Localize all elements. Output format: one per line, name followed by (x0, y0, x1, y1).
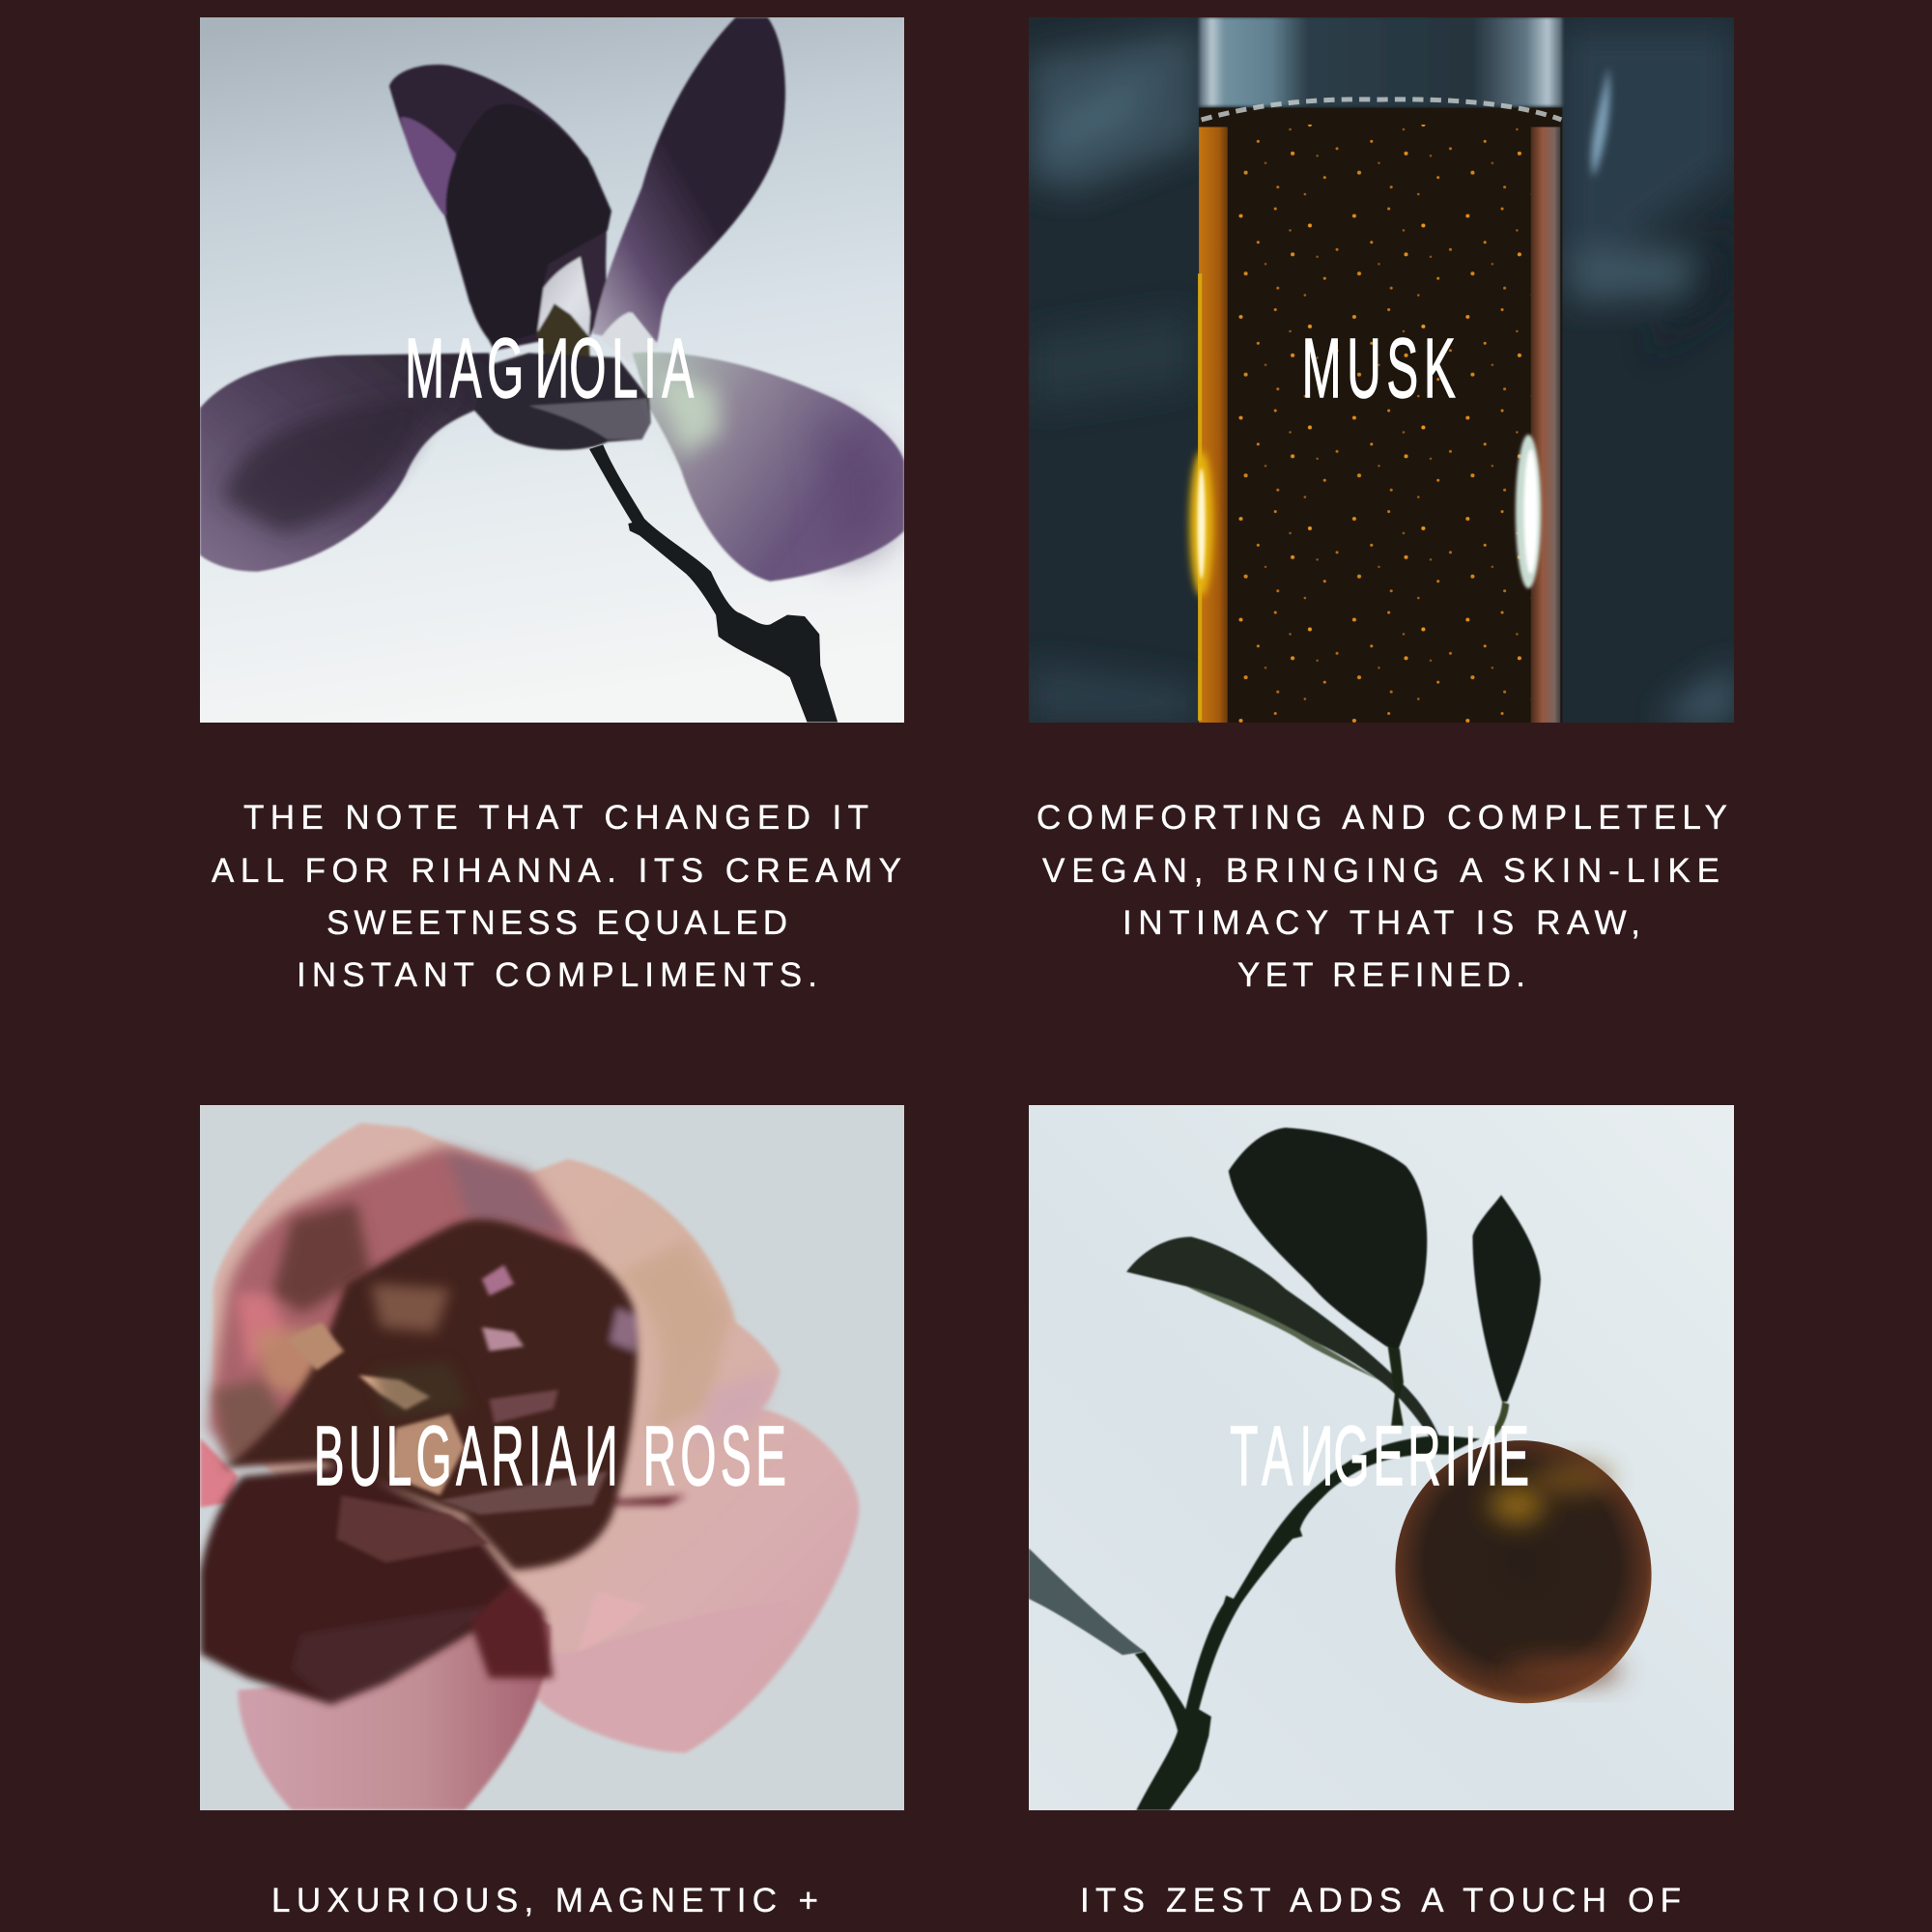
body text: bulgarian rose: LUXURIOUS, MAGNETIC + (271, 1882, 818, 1919)
pale background (200, 1105, 904, 1810)
body text: magnolia: SWEETNESS EQUALED (327, 904, 787, 942)
photo: amber liquid bottle in smoke (1029, 17, 1734, 723)
lower left leaf (1029, 1548, 1145, 1655)
body text: magnolia (211, 799, 901, 994)
body text: musk: YET REFINED. (1237, 956, 1525, 994)
panel: bulgarian rose (200, 1105, 904, 1810)
red left petals (209, 1147, 593, 1462)
body text: musk (1037, 799, 1727, 994)
title: tangerine: N (1296, 1409, 1333, 1503)
smoke wisp (1591, 67, 1609, 178)
meniscus bubbles (1202, 99, 1561, 120)
panel: magnolia (200, 17, 904, 723)
tangerine fruit (1371, 1417, 1676, 1726)
title: tangerine: TA GERI E (1230, 1409, 1533, 1503)
dark rose core (200, 1219, 687, 1705)
outer petals (200, 1122, 859, 1810)
inner petal highlights (287, 1264, 608, 1563)
body text: musk: VEGAN, BRINGING A SKIN-LIKE (1042, 852, 1719, 890)
body text: magnolia: THE NOTE THAT CHANGED IT (243, 799, 868, 837)
photo: rose (200, 1105, 904, 1810)
title: bulgarian rose: N (581, 1409, 618, 1503)
title: tangerine: N (1462, 1409, 1498, 1503)
dark background (1029, 17, 1734, 723)
title: magnolia: MAG OLIA (405, 322, 699, 415)
title: bulgarian rose: BULGARIA ROSE (314, 1409, 790, 1503)
petal shading (223, 389, 465, 533)
panel: tangerine (1029, 1105, 1734, 1810)
flower petals (200, 17, 904, 582)
body text: tangerine: ITS ZEST ADDS A TOUCH OF (1080, 1882, 1681, 1919)
sky background (200, 17, 904, 723)
photo: magnolia flower (200, 17, 904, 723)
body text: musk: INTIMACY THAT IS RAW, (1122, 904, 1640, 942)
peach upper petals (617, 1240, 730, 1433)
glass top of bottle (1199, 17, 1562, 106)
bottle highlights (1189, 273, 1541, 721)
body text: magnolia: INSTANT COMPLIMENTS. (297, 956, 817, 994)
pale background (1029, 1105, 1734, 1810)
title: magnolia: N (529, 322, 569, 415)
panel: musk (1029, 17, 1734, 723)
amber liquid (1199, 108, 1562, 723)
photo: tangerine on branch (1029, 1105, 1734, 1810)
leaves (1126, 1127, 1541, 1452)
magnolia stem (589, 444, 838, 723)
branch (1135, 1435, 1480, 1810)
title: musk: MUSK (1302, 322, 1461, 415)
body text: musk: COMFORTING AND COMPLETELY (1037, 799, 1727, 837)
smoke (1029, 28, 1734, 723)
body text: magnolia: ALL FOR RIHANNA. ITS CREAMY (212, 852, 901, 890)
